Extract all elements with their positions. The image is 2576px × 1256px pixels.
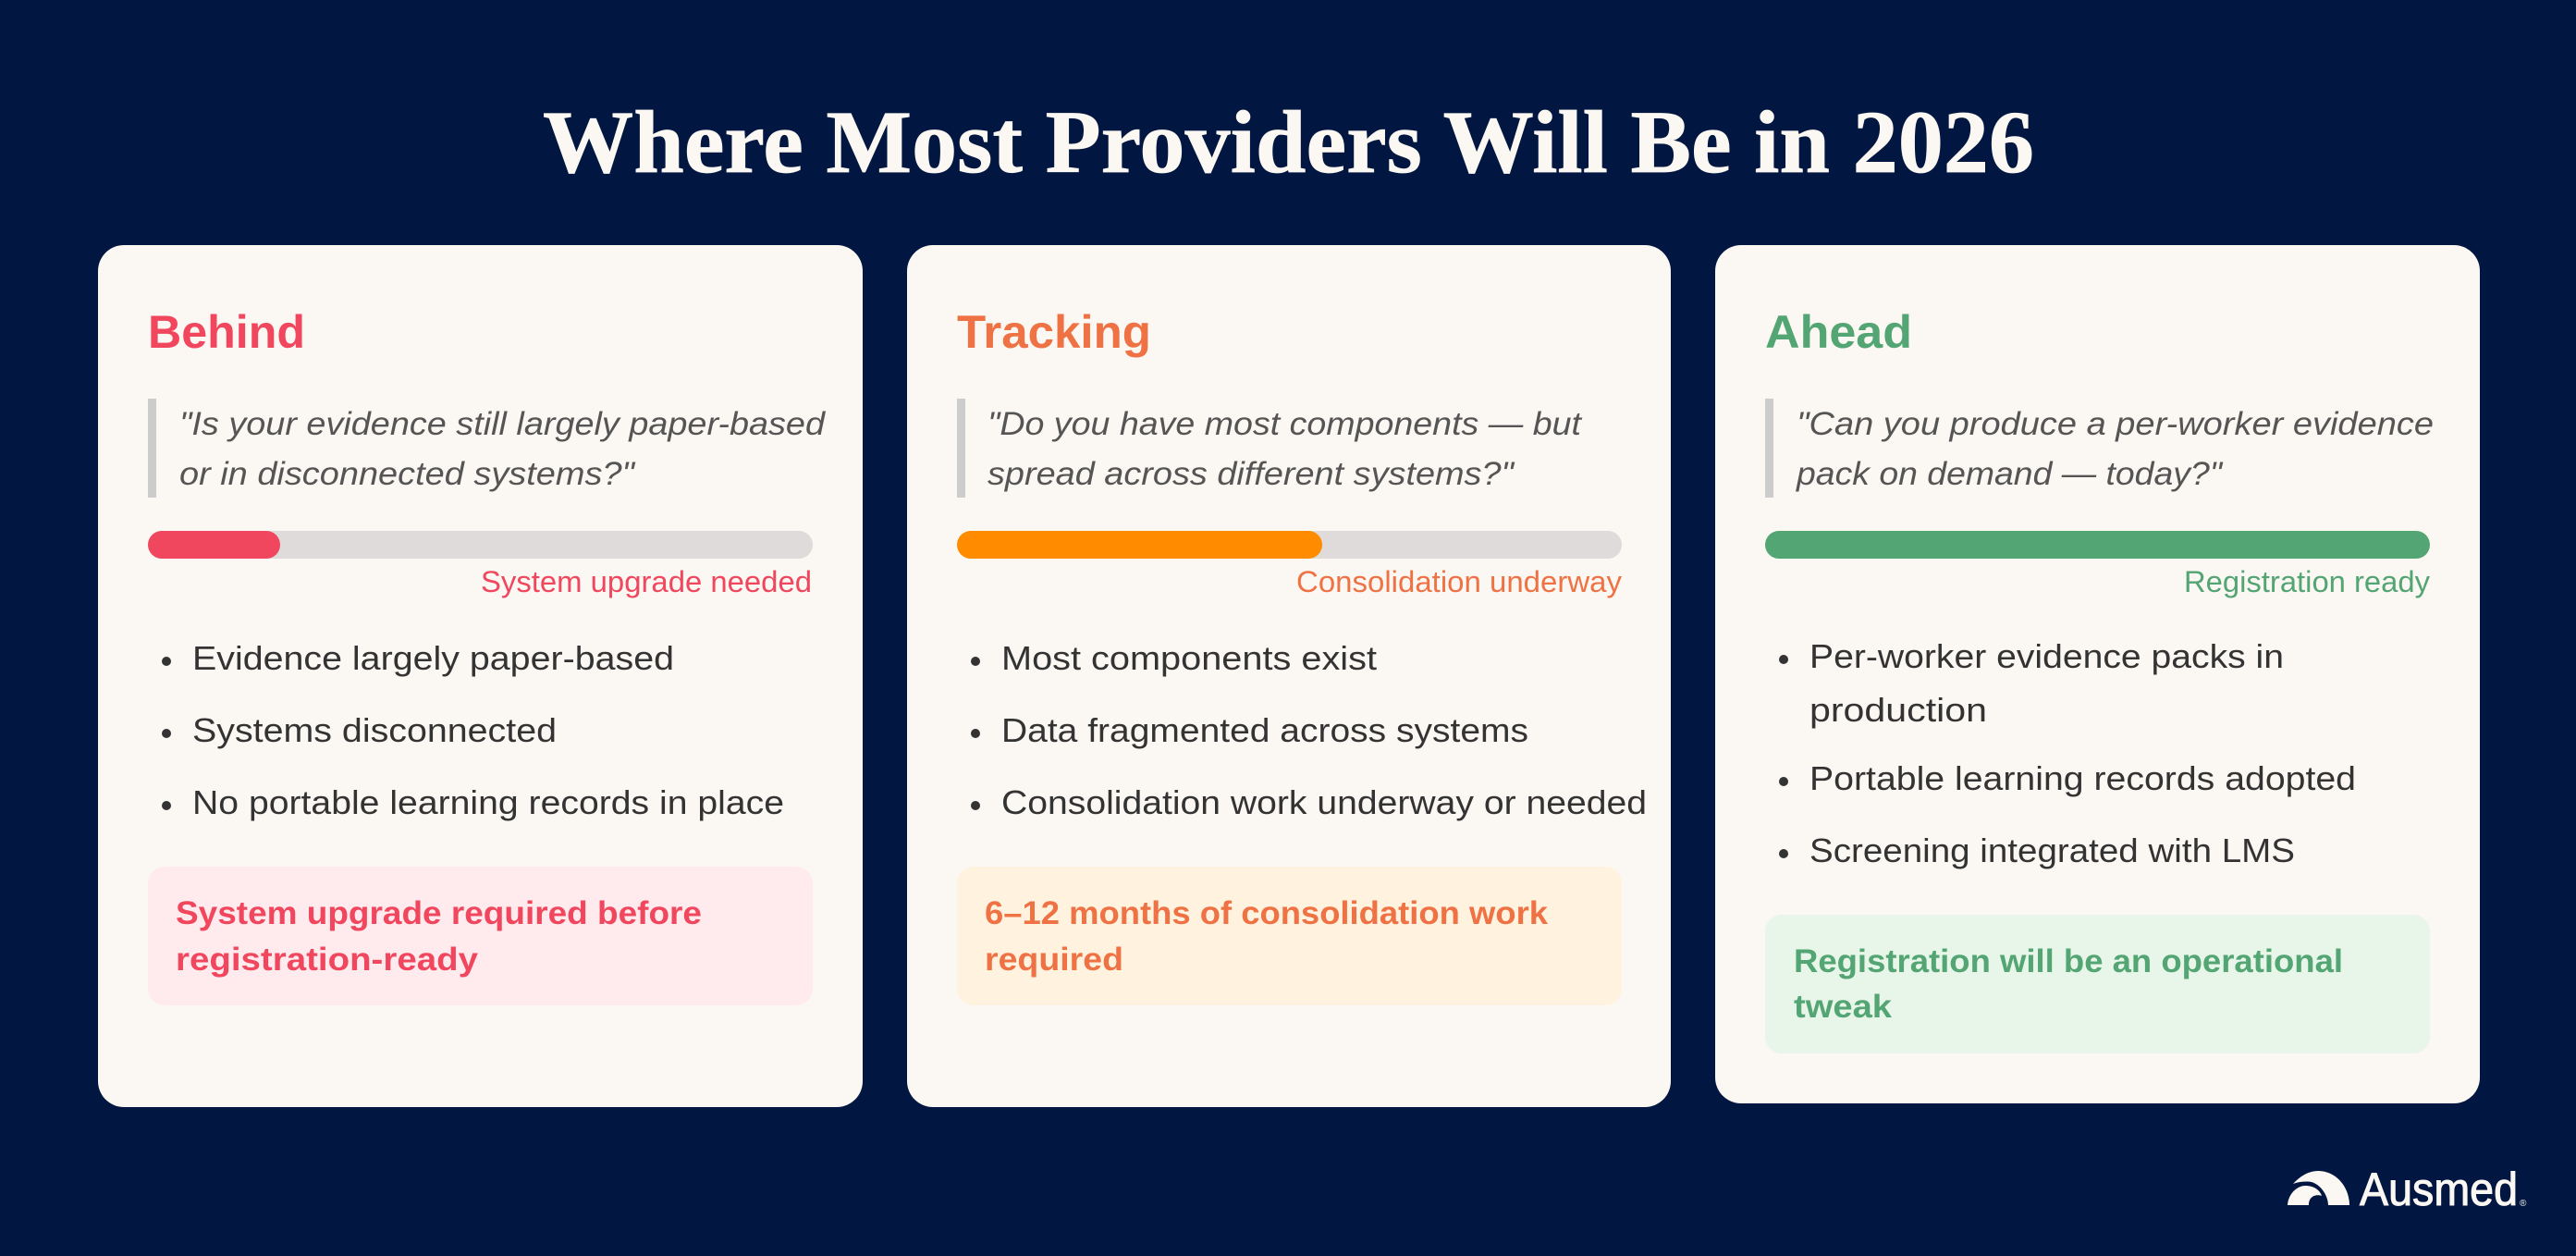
- progress label: Behind: System upgrade needed: [481, 565, 812, 598]
- quote: Ahead: [1765, 399, 2434, 498]
- bullet list: Behind: Evidence largely paper-based: [192, 639, 674, 677]
- bullet list: Ahead: Portable learning records adopted: [1809, 759, 2356, 797]
- quote: Behind: or in disconnected systems?": [179, 456, 636, 492]
- quote: Tracking: spread across different systems?": [987, 456, 1515, 492]
- bullet list: Behind: Systems disconnected: [192, 711, 557, 749]
- quote: Behind: "Is your evidence still largely paper-based: [179, 406, 827, 442]
- callout: Tracking: required: [985, 942, 1123, 978]
- callout: Ahead: tweak: [1794, 989, 1893, 1025]
- registered mark: ®: [2520, 1199, 2527, 1209]
- callout: Ahead: [1765, 915, 2430, 1053]
- progress bar: Behind: [148, 531, 813, 559]
- callout: Behind: System upgrade required before: [176, 895, 702, 931]
- title: Where Most Providers Will Be in 2026: [543, 92, 2034, 191]
- bullet list: Behind: [162, 639, 784, 821]
- bullet list: Tracking: Data fragmented across systems: [1001, 711, 1528, 749]
- logo: Ausmed: [2288, 1164, 2527, 1215]
- panel: Ahead: [1715, 245, 2480, 1103]
- callout: Behind: registration-ready: [176, 942, 479, 978]
- quote: Ahead: "Can you produce a per-worker evidence: [1797, 406, 2434, 442]
- progress label: Ahead: Registration ready: [2184, 565, 2430, 598]
- progress label: Tracking: Consolidation underway: [1296, 565, 1622, 598]
- quote: Tracking: [957, 399, 1582, 498]
- bullet list: Tracking: [971, 639, 1647, 821]
- heading: Tracking: Tracking: [957, 306, 1151, 358]
- quote: Behind: [148, 399, 827, 498]
- heading: Ahead: Ahead: [1765, 306, 1912, 358]
- panel: Tracking: [907, 245, 1671, 1107]
- callout: Ahead: Registration will be an operational: [1794, 943, 2343, 979]
- heading: Behind: Behind: [148, 306, 305, 358]
- bullet list: Tracking: Consolidation work underway or needed: [1001, 783, 1647, 821]
- wordmark: Ausmed: [2360, 1164, 2518, 1215]
- panel: Behind: [98, 245, 863, 1107]
- bullet list: Behind: No portable learning records in place: [192, 783, 784, 821]
- quote: Ahead: pack on demand — today?": [1796, 456, 2224, 492]
- bullet list: Tracking: Most components exist: [1001, 639, 1377, 677]
- callout: Behind: [148, 867, 813, 1005]
- callout: Tracking: 6–12 months of consolidation work: [985, 895, 1549, 931]
- bullet list: Ahead: production: [1809, 691, 1987, 729]
- progress bar: Ahead: [1765, 531, 2430, 559]
- progress bar: Tracking: [957, 531, 1622, 559]
- bullet list: Ahead: Screening integrated with LMS: [1809, 831, 2295, 869]
- icon: Ausmed arch: [2288, 1171, 2349, 1205]
- bullet list: Ahead: [1779, 637, 2356, 869]
- callout: Tracking: [957, 867, 1622, 1005]
- bullet list: Ahead: Per-worker evidence packs in: [1809, 637, 2284, 675]
- quote: Tracking: "Do you have most components — but: [987, 406, 1582, 442]
